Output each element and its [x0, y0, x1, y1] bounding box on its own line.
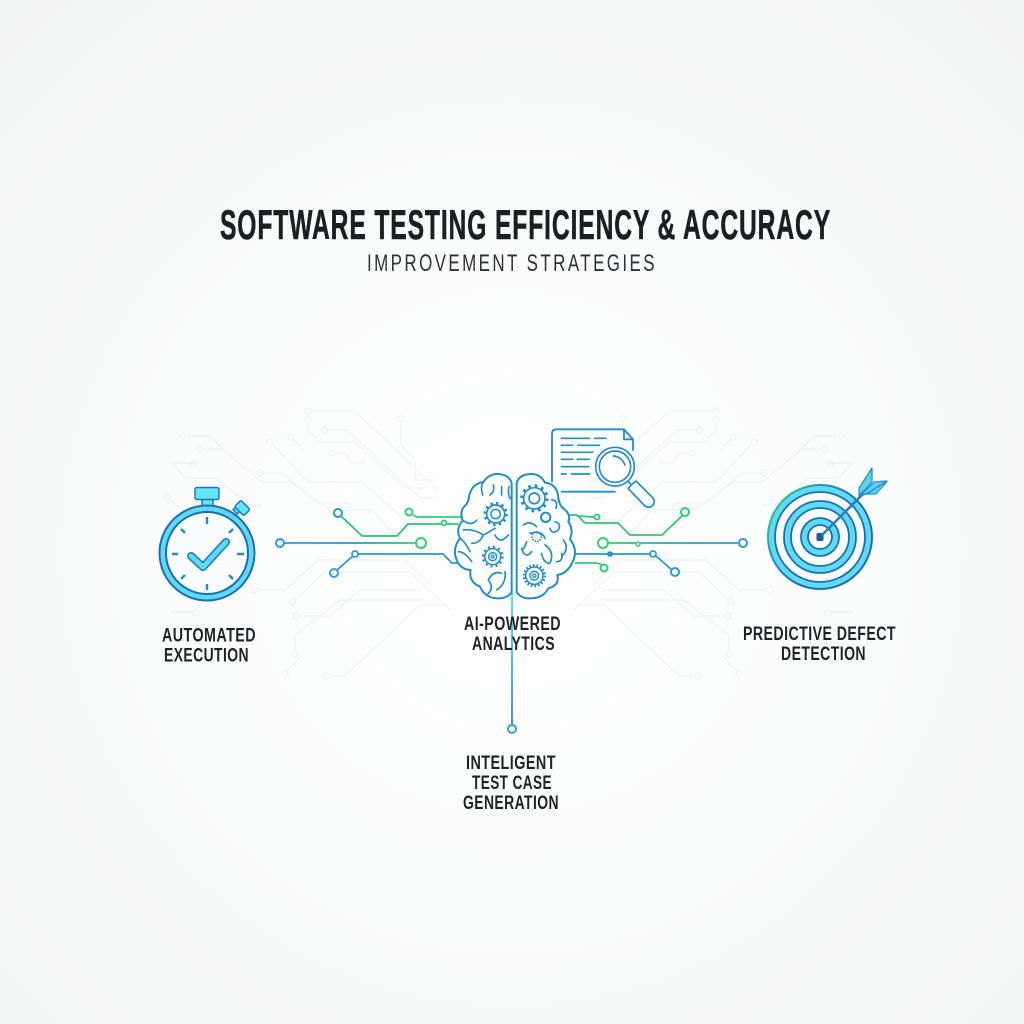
arrow shaft	[822, 491, 866, 535]
label: predictive defect detection	[743, 623, 896, 665]
gears	[483, 486, 550, 586]
magnifier	[596, 447, 654, 507]
target rings	[768, 485, 872, 589]
label: automated execution: AUTOMATED	[162, 624, 256, 646]
label: predictive defect detection: PREDICTIVE DEFECT	[743, 623, 896, 645]
stopwatch ticks	[172, 517, 244, 590]
label: automated execution	[162, 624, 256, 666]
brain folds	[458, 482, 510, 595]
left circuit connectors	[276, 508, 462, 577]
vertical connector to test case generation	[508, 592, 516, 733]
label: intelligent test case generation	[463, 752, 559, 814]
icon: target with arrow	[768, 468, 887, 589]
label: intelligent test case generation: TEST CASE	[472, 772, 552, 794]
icon: document with magnifier	[552, 429, 654, 507]
label: ai-powered analytics: ANALYTICS	[472, 633, 555, 655]
document page	[552, 429, 633, 492]
label: predictive defect detection: DETECTION	[781, 643, 866, 665]
icon: stopwatch	[160, 488, 254, 600]
label: ai-powered analytics	[464, 613, 561, 655]
label: intelligent test case generation: GENERATION	[463, 792, 559, 814]
right hemisphere	[517, 474, 575, 598]
subtitle: IMPROVEMENT STRATEGIES	[367, 250, 657, 277]
left hemisphere	[455, 474, 512, 598]
label: ai-powered analytics: AI-POWERED	[464, 613, 561, 635]
stopwatch body	[160, 506, 254, 600]
stopwatch check mark	[191, 542, 226, 567]
right circuit connectors	[568, 508, 747, 576]
arrow fletching	[859, 468, 887, 496]
label: automated execution: EXECUTION	[164, 644, 249, 666]
icon: brain with gears	[455, 474, 575, 598]
document text lines	[561, 438, 607, 474]
faint circuit board background	[164, 408, 860, 679]
target bullseye	[816, 533, 824, 541]
stopwatch crown	[195, 488, 250, 516]
label: intelligent test case generation: INTELIGENT	[466, 752, 556, 774]
